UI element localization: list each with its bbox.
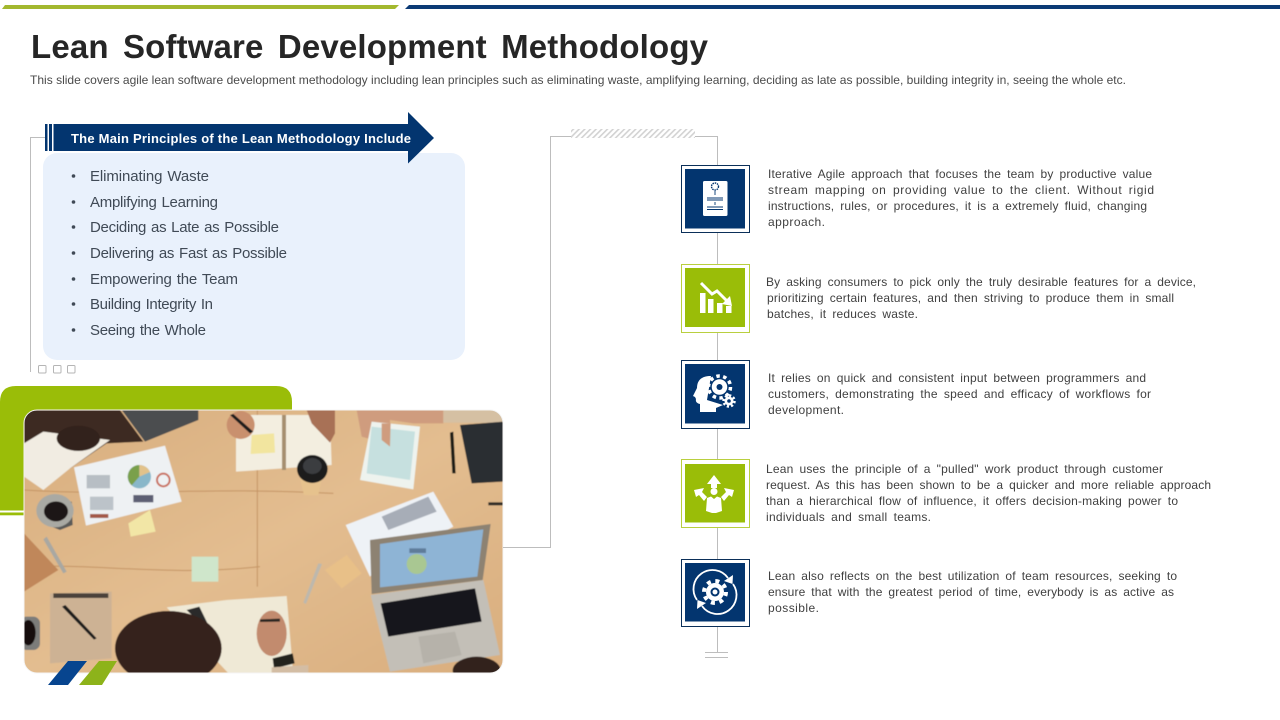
text block 2: By asking consumers to pick only the truly desirable features for a device, xyxy=(766,275,1196,289)
text block 3 xyxy=(768,371,1151,417)
text block 5 xyxy=(768,569,1177,615)
text block 1: instructions, rules, or procedures, it is a extremely fluid, changing xyxy=(768,199,1147,213)
icon 5: gear with cycle arrows xyxy=(682,560,750,626)
accent parallelograms xyxy=(48,661,117,685)
list of principles: Amplifying Learning xyxy=(90,194,218,211)
list of principles: Building Integrity In xyxy=(90,296,213,313)
text block 4: than a hierarchical flow of influence, it offers decision-making power to xyxy=(766,494,1178,508)
green backing shape xyxy=(0,386,292,515)
connector: photo to timeline xyxy=(503,136,728,658)
list of principles: Seeing the Whole xyxy=(90,322,206,339)
hatched strip xyxy=(571,129,695,138)
text block 1 xyxy=(768,167,1154,229)
text block 4 xyxy=(766,462,1211,524)
text block 5: Lean also reflects on the best utilization of team resources, seeking to xyxy=(768,569,1177,583)
connector: left bracket xyxy=(30,138,45,372)
text block 2 xyxy=(766,275,1196,321)
subtitle: This slide covers agile lean software development methodology including lean principles such as eliminating waste, amplifying learning, deciding as late as possible, building integrity in, seeing the whole etc. xyxy=(30,73,1126,87)
text block 1: stream mapping on providing value to the client. Without rigid xyxy=(768,183,1154,197)
top accent bars xyxy=(2,5,1280,9)
text block 5: ensure that with the greatest period of time, everybody is as active as xyxy=(768,585,1174,599)
text block 3: customers, demonstrating the speed and efficacy of workflows for xyxy=(768,387,1151,401)
text block 3: It relies on quick and consistent input between programmers and xyxy=(768,371,1146,385)
list of principles xyxy=(72,168,287,339)
text block 2: batches, it reduces waste. xyxy=(767,307,918,321)
text block 2: prioritizing certain features, and then striving to produce them in small xyxy=(767,291,1174,305)
text block 4: individuals and small teams. xyxy=(766,510,931,524)
text block 3: development. xyxy=(768,403,844,417)
text block 5: possible. xyxy=(768,601,819,615)
arrow banner heading: The Main Principles of the Lean Methodology Include xyxy=(71,131,411,146)
photo: team around a wooden table xyxy=(20,408,507,686)
panel: main principles xyxy=(43,153,465,360)
arrow banner heading xyxy=(45,112,434,164)
list of principles: Empowering the Team xyxy=(90,271,238,288)
list of principles: Eliminating Waste xyxy=(90,168,209,185)
title: Lean Software Development Methodology xyxy=(31,28,709,65)
text block 4: Lean uses the principle of a "pulled" work product through customer xyxy=(766,462,1163,476)
icon 4: person with three arrows xyxy=(682,460,750,528)
icon 1: document xyxy=(682,166,750,232)
text block 1: Iterative Agile approach that focuses the team by productive value xyxy=(768,167,1152,181)
text block 1: approach. xyxy=(768,215,825,229)
icon 2: declining bars xyxy=(682,264,750,332)
photo outline xyxy=(24,410,503,673)
decorative small squares xyxy=(38,366,75,373)
text block 4: request. As this has been shown to be a quicker and more reliable approach xyxy=(766,478,1211,492)
list of principles: Delivering as Fast as Possible xyxy=(90,245,287,262)
icon 3: head with gears xyxy=(682,360,750,428)
list of principles: Deciding as Late as Possible xyxy=(90,219,279,236)
